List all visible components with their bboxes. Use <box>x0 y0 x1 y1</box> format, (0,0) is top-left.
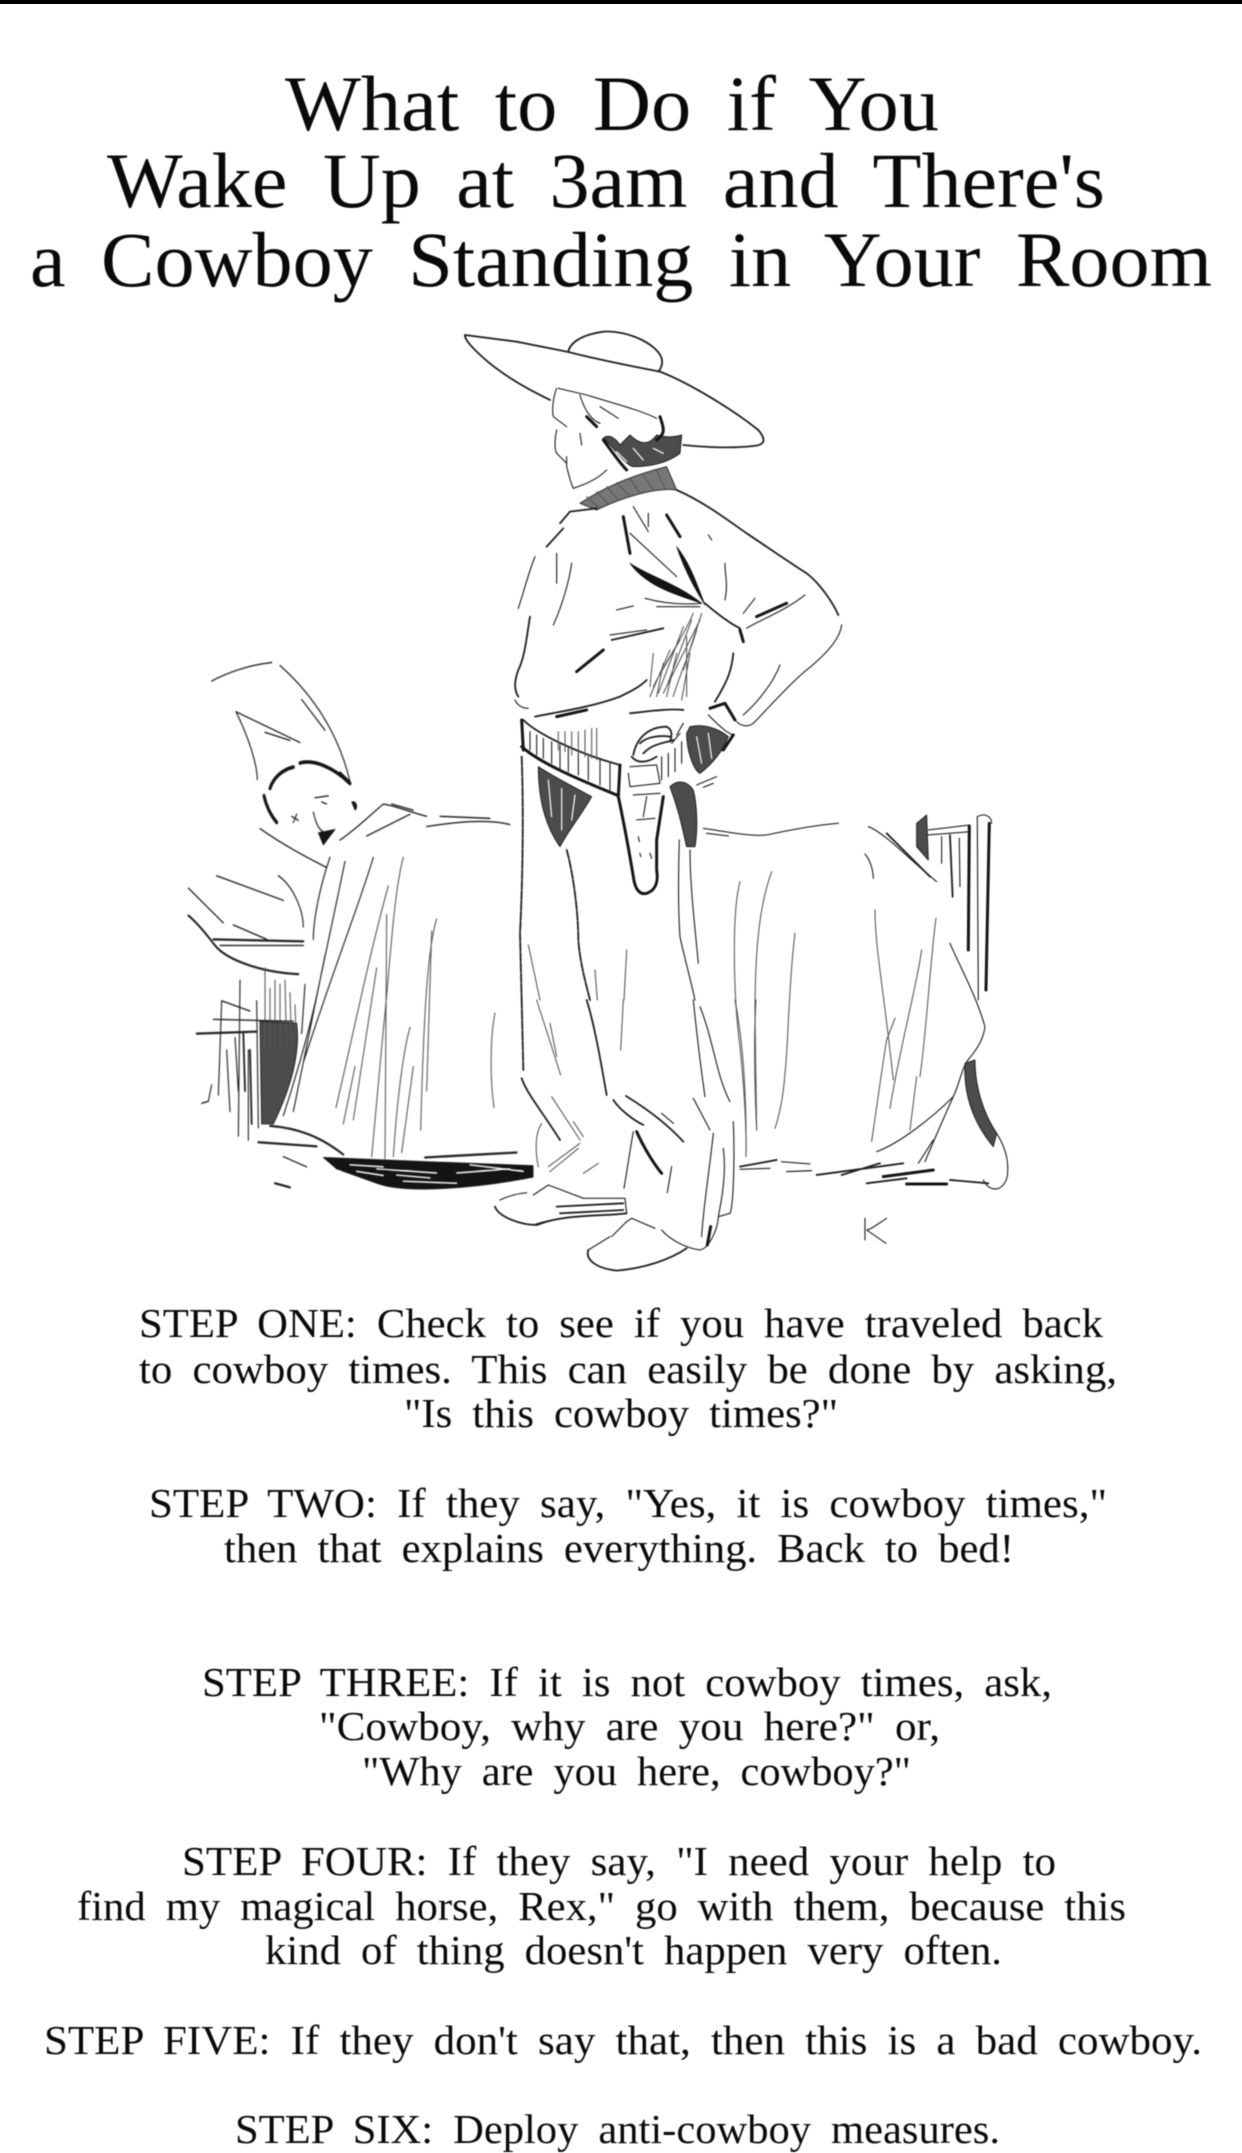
step four <box>77 1838 1126 1973</box>
top black bar <box>0 0 1242 4</box>
step two: STEP TWO: If they say, "Yes, it is cowboy times," <box>149 1480 1107 1526</box>
cowboy: lower legs and boots <box>495 1000 757 1271</box>
title: What to Do if You <box>285 60 939 147</box>
step one: STEP ONE: Check to see if you have traveled back <box>139 1300 1104 1346</box>
cowboy: gun belt, holster and upper legs <box>520 720 728 1000</box>
step four: kind of thing doesn't happen very often. <box>265 1927 1002 1973</box>
step two <box>149 1480 1107 1571</box>
step five: STEP FIVE: If they don't say that, then this is a bad cowboy. <box>44 2017 1202 2063</box>
step one: to cowboy times. This can easily be done by asking, <box>139 1346 1117 1392</box>
step four: STEP FOUR: If they say, "I need your help to <box>182 1838 1056 1884</box>
step three <box>202 1659 1052 1794</box>
cowboy: hat, head and torso <box>465 332 842 750</box>
step four: find my magical horse, Rex," go with them, because this <box>77 1883 1126 1929</box>
illustration: cowboy standing beside bed <box>188 332 1008 1271</box>
artist signature K <box>865 1218 887 1243</box>
title: Wake Up at 3am and There's <box>107 137 1105 224</box>
bed and sleeping person, left side <box>188 663 533 1189</box>
step one <box>139 1300 1117 1436</box>
title: a Cowboy Standing in Your Room <box>30 216 1212 303</box>
step six: STEP SIX: Deploy anti-cowboy measures. <box>235 2106 1000 2152</box>
step three: "Why are you here, cowboy?" <box>362 1748 911 1794</box>
step one: "Is this cowboy times?" <box>404 1390 838 1436</box>
step three: STEP THREE: If it is not cowboy times, ask, <box>202 1659 1052 1705</box>
title <box>30 60 1212 303</box>
bed, right side with foot rail <box>703 815 1008 1189</box>
step two: then that explains everything. Back to bed! <box>224 1525 1014 1571</box>
step three: "Cowboy, why are you here?" or, <box>319 1703 940 1749</box>
